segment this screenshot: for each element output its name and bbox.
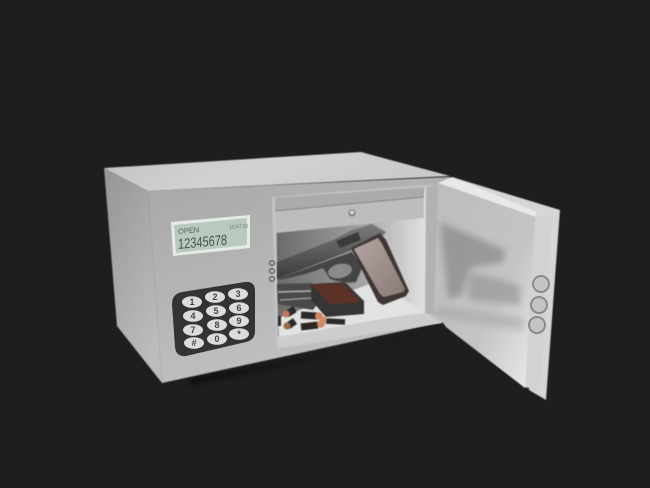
door lock bolts <box>529 276 549 333</box>
LCD display <box>171 215 250 256</box>
safe opening <box>272 184 442 349</box>
door edge <box>452 177 560 400</box>
keypad labels: 6 <box>236 303 242 313</box>
keypad labels: 9 <box>236 316 242 326</box>
keypad <box>172 282 255 356</box>
slide <box>277 224 386 279</box>
keypad labels: 3 <box>235 289 241 299</box>
keypad labels: 5 <box>213 306 219 316</box>
front face <box>148 177 450 383</box>
keypad labels: 2 <box>212 292 218 302</box>
bullet 1 <box>282 309 295 318</box>
keypad labels: # <box>191 338 197 348</box>
door inner bright border <box>523 216 552 390</box>
trigger guard opening <box>327 262 353 280</box>
drawer lock <box>348 209 356 217</box>
safe shadow <box>190 325 430 384</box>
wood panel <box>312 283 361 304</box>
left side face <box>104 168 162 383</box>
keypad labels: 8 <box>214 320 220 330</box>
frame indicator dots <box>270 261 274 281</box>
back wall <box>276 187 426 336</box>
frame bottom edge <box>278 313 442 348</box>
ammunition and magazines <box>277 282 364 330</box>
drawer edge line <box>275 197 424 211</box>
open door <box>434 177 560 400</box>
door frame <box>272 184 442 349</box>
safe body <box>104 152 450 383</box>
keypad labels <box>189 289 242 348</box>
LCD digits: 12345678 <box>178 233 227 253</box>
bullet 3 <box>301 312 323 320</box>
frame and trigger guard <box>278 252 362 283</box>
shelf floor <box>278 282 425 337</box>
door glossy panel <box>434 183 535 388</box>
stacked magazines <box>277 283 318 310</box>
grip panel <box>354 238 405 297</box>
keypad labels: 0 <box>214 334 220 344</box>
keypad labels: * <box>237 329 241 339</box>
keypad labels: 1 <box>189 297 195 307</box>
bullet 5 <box>320 316 345 324</box>
LCD time text: 10:57:31 <box>229 223 249 231</box>
drawer top strip <box>275 187 425 211</box>
keypad labels: 7 <box>190 325 196 335</box>
handgun <box>277 224 409 305</box>
door hinge edge highlight <box>438 177 537 217</box>
drawer front <box>275 197 424 233</box>
grip outline <box>351 233 409 305</box>
top face <box>104 152 450 191</box>
bullet 6 <box>278 316 281 326</box>
bullet 2 <box>284 321 295 330</box>
ammo box <box>311 282 364 317</box>
ejection port <box>336 232 361 248</box>
keypad labels: 4 <box>190 311 196 321</box>
LCD status text: OPEN <box>178 225 199 236</box>
frame right edge <box>425 184 441 316</box>
keypad base <box>172 282 255 356</box>
bullet 4 <box>301 320 325 328</box>
gun reflection in door <box>436 222 525 330</box>
